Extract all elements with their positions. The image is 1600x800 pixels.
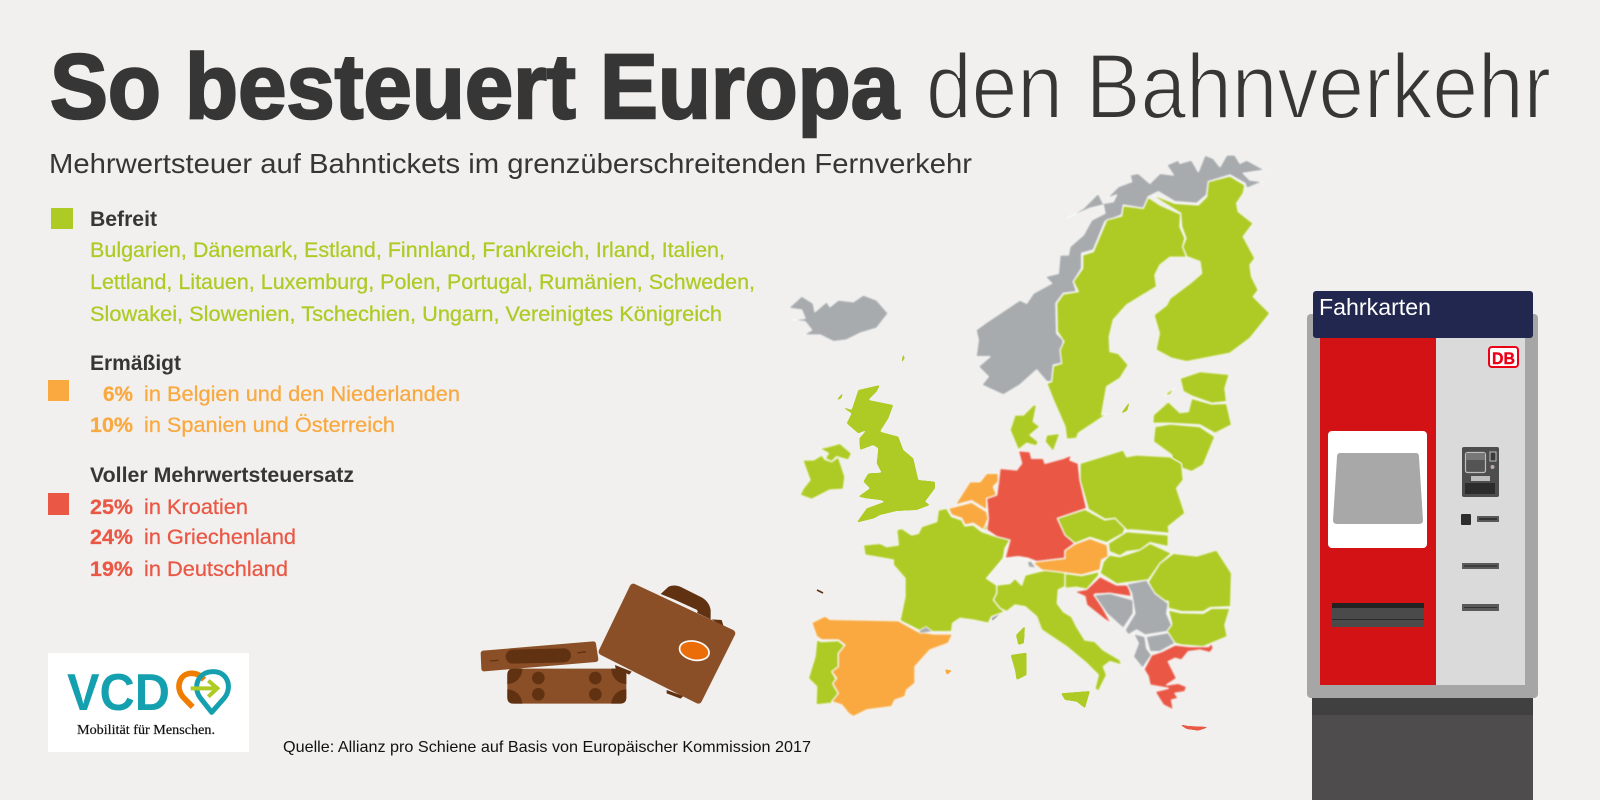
Poland bbox=[1080, 450, 1185, 533]
legend: voller Mehrwertsteuersatz: in Kroatien bbox=[144, 496, 248, 519]
legend: ermäßigt: 10% bbox=[90, 414, 133, 437]
machine: grey panel bbox=[1436, 330, 1525, 685]
suitcase: upright case bbox=[602, 585, 732, 700]
suitcase: open lid bbox=[483, 644, 596, 669]
legend: befreit: Slowakei, Slowenien, Tschechien, Ungarn, Vereinigtes Königreich bbox=[90, 303, 722, 326]
Finland bbox=[1153, 176, 1270, 362]
legend: voller Mehrwertsteuersatz: 25% bbox=[90, 496, 133, 519]
legend: voller Mehrwertsteuersatz: in Griechenland bbox=[144, 526, 296, 549]
Albania bbox=[1133, 633, 1152, 668]
legend: ermäßigt: in Spanien und Österreich bbox=[144, 414, 395, 437]
legend: ermäßigt bbox=[48, 352, 460, 437]
logo: VCD: VCD bbox=[67, 664, 170, 722]
France bbox=[863, 508, 1010, 632]
title bbox=[50, 36, 1551, 138]
Slovakia bbox=[1108, 532, 1168, 556]
Spain bbox=[812, 616, 953, 717]
Latvia bbox=[1153, 398, 1232, 433]
Bulgaria bbox=[1167, 608, 1230, 647]
Austria bbox=[1033, 538, 1108, 575]
Belgium bbox=[948, 502, 988, 530]
machine: pedestal bbox=[1312, 698, 1533, 800]
legend: voller Mehrwertsteuersatz: in Deutschland bbox=[144, 558, 288, 581]
machine: body bbox=[1307, 314, 1538, 698]
Italy bbox=[993, 568, 1122, 692]
map: western, central and southern Europe bbox=[800, 385, 1232, 731]
Crete bbox=[1179, 724, 1209, 731]
legend: ermäßigt: in Belgien und den Niederlanden bbox=[144, 383, 460, 406]
subtitle: Mehrwertsteuer auf Bahntickets im grenzüberschreitenden Fernverkehr bbox=[49, 148, 972, 179]
legend: ermäßigt: Ermäßigt bbox=[90, 352, 181, 375]
Andorra bbox=[919, 627, 933, 633]
Greece bbox=[1144, 643, 1213, 710]
Bosnia and Herzegovina bbox=[1094, 593, 1133, 628]
Serbia bbox=[1125, 580, 1172, 635]
Hungary bbox=[1100, 543, 1172, 584]
Denmark bbox=[1010, 405, 1060, 452]
Liechtenstein bbox=[1028, 561, 1035, 567]
Germany bbox=[987, 451, 1087, 562]
Norway bbox=[976, 155, 1265, 395]
logo: VCD bbox=[48, 653, 249, 752]
Switzerland bbox=[987, 557, 1042, 585]
Romania bbox=[1148, 550, 1232, 612]
logo: VCD: Mobilität für Menschen. bbox=[77, 722, 215, 737]
title: So besteuert Europa bbox=[50, 36, 900, 138]
machine: red panel bbox=[1320, 330, 1436, 685]
machine: coin slots bbox=[1461, 514, 1499, 611]
ticket machine bbox=[1307, 291, 1538, 800]
Iceland bbox=[788, 295, 888, 342]
map: Nordic and Baltic countries bbox=[788, 155, 1270, 472]
machine: header: Fahrkarten bbox=[1319, 294, 1431, 320]
legend: befreit: Befreit bbox=[90, 208, 157, 231]
United Kingdom bbox=[836, 385, 935, 523]
North Macedonia bbox=[1146, 633, 1175, 652]
legend: voller Mehrwertsteuersatz: Voller Mehrwertsteuersatz bbox=[90, 464, 354, 487]
legend: befreit: Bulgarien, Dänemark, Estland, Finnland, Frankreich, Irland, Italien, bbox=[90, 239, 725, 262]
Northern Ireland bbox=[819, 443, 852, 462]
Monaco area bbox=[992, 614, 1000, 622]
legend: voller Mehrwertsteuersatz: 24% bbox=[90, 526, 133, 549]
legend: befreit bbox=[51, 208, 755, 326]
Gotland and Faroe islands bbox=[901, 353, 1130, 414]
Slovenia bbox=[1065, 572, 1099, 589]
legend: voller Mehrwertsteuersatz bbox=[48, 464, 354, 581]
Italian islands bbox=[1011, 626, 1090, 708]
legend: voller Mehrwertsteuersatz: 19% bbox=[90, 558, 133, 581]
Lithuania bbox=[1153, 424, 1215, 472]
machine: header bbox=[1313, 291, 1533, 338]
Croatia bbox=[1074, 577, 1132, 624]
machine: screen bbox=[1328, 431, 1427, 548]
Luxembourg bbox=[983, 523, 989, 530]
icon: DB logo: DB bbox=[1492, 349, 1515, 368]
Ireland bbox=[800, 455, 845, 499]
source note: Quelle: Allianz pro Schiene auf Basis von Europäischer Kommission 2017 bbox=[283, 739, 811, 756]
machine: ticket slot bbox=[1332, 603, 1424, 627]
Czechia bbox=[1057, 509, 1125, 543]
Portugal bbox=[808, 640, 845, 705]
suitcase: base bbox=[507, 669, 626, 704]
legend: ermäßigt: 6% bbox=[103, 383, 133, 406]
Sweden bbox=[1047, 197, 1187, 439]
icon: suitcases bbox=[483, 585, 732, 704]
legend: befreit: Lettland, Litauen, Luxemburg, Polen, Portugal, Rumänien, Schweden, bbox=[90, 271, 755, 294]
mark: small brown island bbox=[817, 590, 823, 593]
machine: payment terminal bbox=[1462, 447, 1499, 497]
map: Europe bbox=[788, 155, 1270, 731]
Estonia bbox=[1164, 372, 1229, 403]
Balearic island bbox=[945, 669, 952, 675]
Netherlands bbox=[955, 473, 998, 510]
